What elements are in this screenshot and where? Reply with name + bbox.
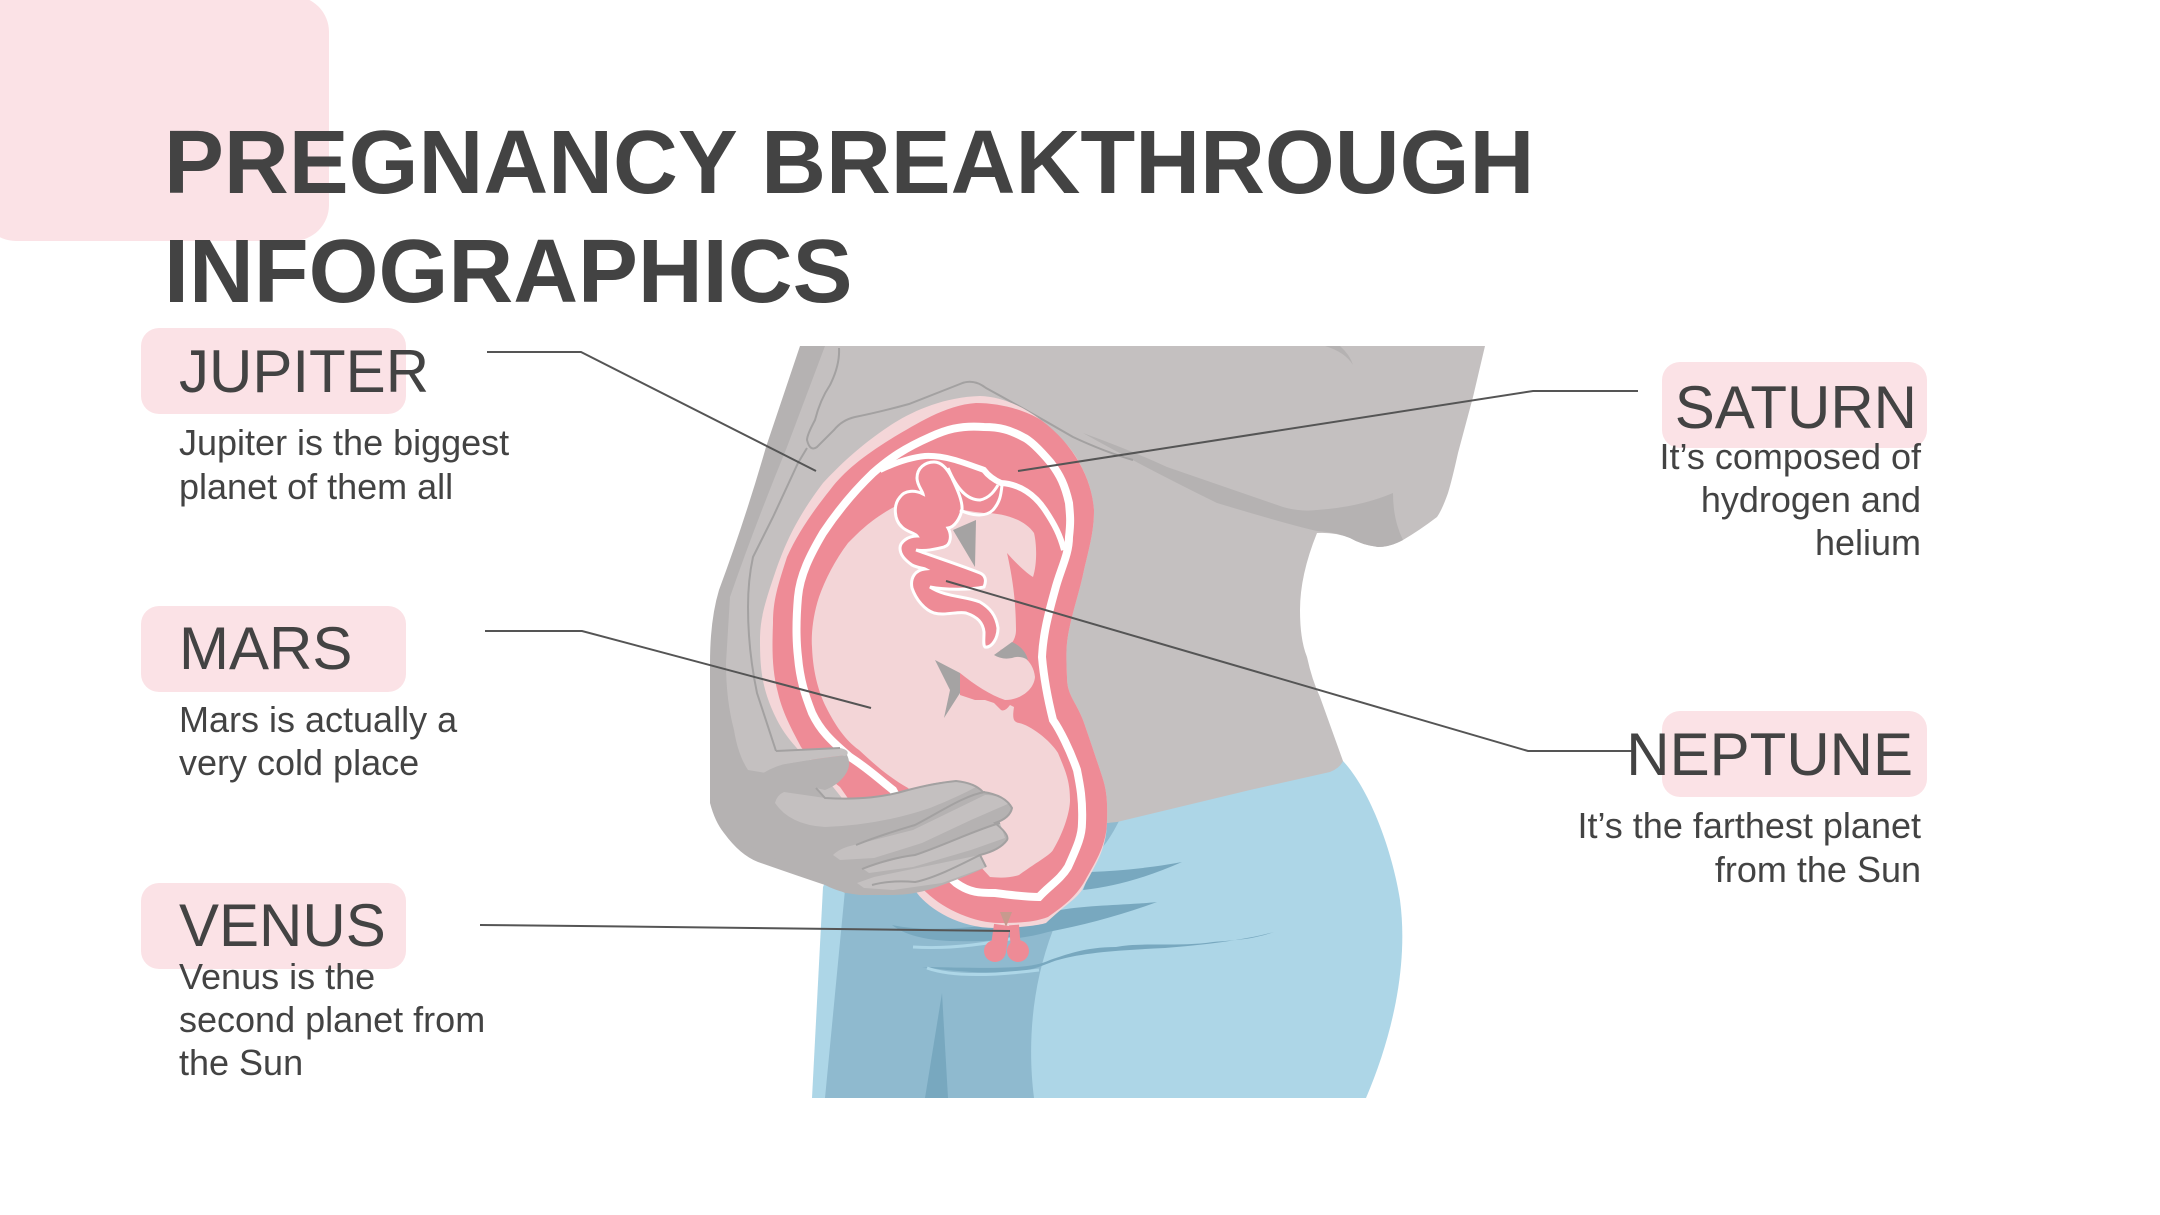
connector: Saturn — [1018, 391, 1638, 471]
label: Saturn: SATURN — [1675, 374, 1917, 441]
label: Venus: VENUS — [179, 892, 386, 959]
label: Saturn: It’s composed of — [1660, 436, 1921, 477]
placenta and umbilical cord — [895, 462, 1002, 647]
label: Neptune: NEPTUNE — [1626, 721, 1913, 788]
torso — [710, 346, 1485, 895]
label: Mars — [141, 606, 458, 783]
label: Mars: MARS — [179, 615, 352, 682]
label: Jupiter: JUPITER — [179, 338, 429, 405]
uterus — [760, 396, 1107, 928]
label: Saturn: helium — [1815, 522, 1921, 563]
label: Neptune — [1577, 711, 1927, 890]
label: Neptune: It’s the farthest planet — [1577, 805, 1921, 846]
label: Neptune: from the Sun — [1715, 849, 1921, 890]
cervix and ovaries — [984, 912, 1029, 962]
label: Jupiter: planet of them all — [179, 466, 453, 507]
connector: Jupiter — [487, 352, 816, 471]
connector: Neptune — [946, 581, 1635, 751]
label: Saturn — [1660, 362, 1927, 563]
fetus — [812, 505, 1070, 878]
label: Venus: second planet from — [179, 999, 485, 1040]
label: Venus — [141, 883, 485, 1083]
label: Jupiter — [141, 328, 509, 507]
label: Jupiter: Jupiter is the biggest — [179, 422, 509, 463]
title: PREGNANCY BREAKTHROUGH — [164, 113, 1534, 213]
label: Mars: very cold place — [179, 742, 419, 783]
label: Venus: Venus is the — [179, 956, 375, 997]
connector: Venus — [480, 925, 1010, 931]
illustration: pregnant torso cross-section — [710, 346, 1485, 1098]
title: INFOGRAPHICS — [164, 222, 852, 322]
hand — [710, 748, 1012, 895]
label: Mars: Mars is actually a — [179, 699, 457, 740]
connector: Mars — [485, 631, 871, 708]
label: Saturn: hydrogen and — [1701, 479, 1921, 520]
decorative corner panel — [0, 0, 329, 241]
label: Venus: the Sun — [179, 1042, 303, 1083]
jeans — [812, 761, 1402, 1098]
